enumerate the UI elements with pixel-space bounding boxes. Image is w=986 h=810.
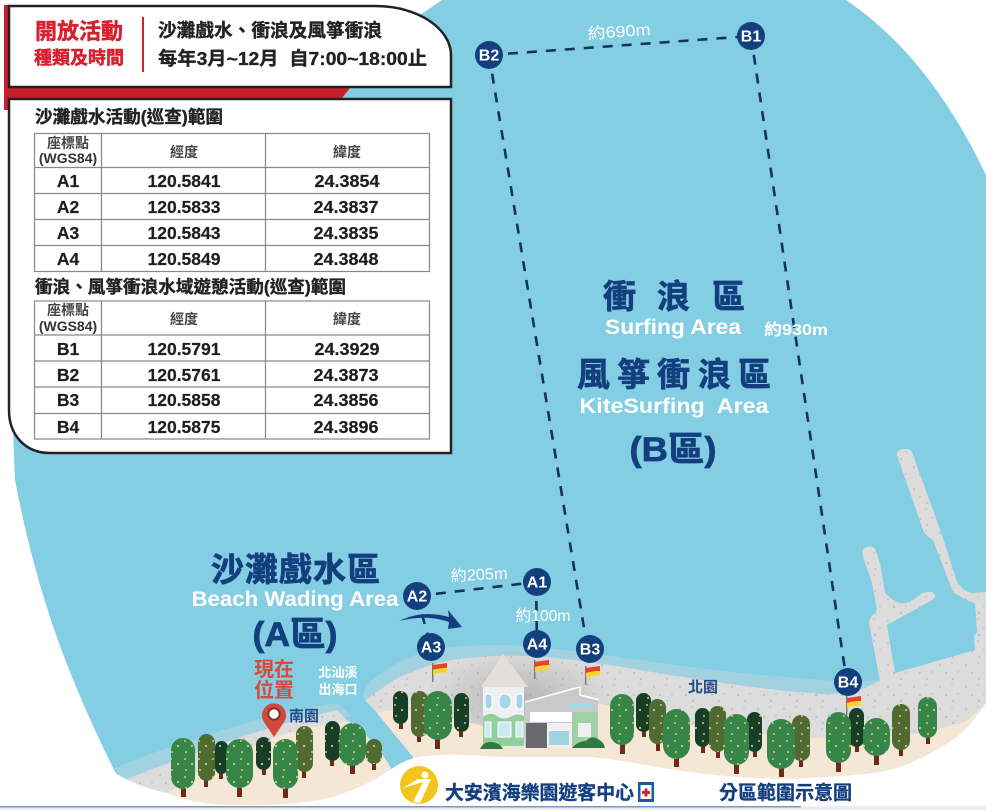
flag at A4 [534, 660, 549, 679]
activity and hours text: 每年3月~12月 自7:00~18:00止 [158, 48, 427, 69]
current position label [254, 658, 294, 702]
label: about 690m: 約690m [587, 21, 651, 43]
table: surfing coordinates: B4 [57, 417, 79, 437]
divider [142, 17, 144, 72]
marker A4 [523, 630, 551, 658]
table: surfing coordinates: B3 [57, 390, 79, 410]
green wing [572, 712, 598, 747]
heading: kitesurfing zone: 風箏衝浪區 [577, 356, 771, 393]
trees: north garden left [393, 691, 469, 749]
activity and hours text [158, 20, 427, 69]
flag at B3 [585, 666, 600, 685]
table: beach wading coordinates: (WGS84) [39, 150, 97, 166]
table: beach wading coordinates: 120.5849 [148, 249, 221, 269]
table: surfing coordinates: 24.3856 [314, 390, 379, 410]
icon: first aid [638, 782, 654, 802]
heading: surfing zone: Surfing Area [605, 316, 741, 339]
trees: south garden [171, 721, 382, 798]
marker B3: B3 [580, 642, 600, 658]
heading: kitesurfing zone [577, 356, 771, 418]
marker B3 [576, 635, 604, 663]
table: surfing coordinates [34, 301, 430, 439]
heading: zone A: (A區) [252, 616, 338, 654]
marker A3: A3 [421, 640, 441, 656]
bottom rule [0, 806, 986, 810]
icon: location pin [262, 703, 286, 737]
table: surfing coordinates: 24.3929 [314, 339, 380, 359]
table: beach wading coordinates: 24.3854 [314, 171, 380, 191]
current position label: 現在 [254, 658, 294, 681]
table: surfing coordinates: (WGS84) [39, 318, 97, 334]
marker B4 [834, 668, 862, 696]
heading: activities and times: 開放活動 [35, 19, 123, 44]
south shore land [115, 703, 392, 808]
zone B dashed boundary [489, 36, 845, 670]
table: surfing coordinates: 座標點 [47, 302, 89, 318]
table: beach wading coordinates: 24.3848 [314, 249, 379, 269]
table: surfing coordinates: 120.5791 [148, 339, 221, 359]
icon: information logo [400, 766, 438, 804]
heading: beach wading zone: Beach Wading Area [192, 588, 399, 611]
table: beach wading coordinates: 24.3837 [314, 197, 378, 217]
heading: activities and times: 種類及時間 [34, 48, 124, 68]
table: surfing coordinates: B2 [57, 365, 79, 385]
panel: opening hours [9, 6, 451, 87]
table: beach wading coordinates: A4 [57, 249, 79, 269]
heading: beach wading zone: 沙灘戲水區 [211, 551, 380, 588]
visitor centre building [480, 654, 605, 749]
table: surfing coordinates: 24.3873 [314, 365, 379, 385]
glass room [547, 723, 572, 747]
annex white band [530, 712, 572, 722]
door [526, 723, 547, 748]
label: visitor centre: 大安濱海樂園遊客中心 [445, 781, 634, 804]
red accent behind cards [4, 5, 350, 110]
table: surfing coordinates: 120.5875 [148, 417, 221, 437]
table: surfing coordinates: 緯度 [333, 311, 361, 327]
label: about 930m: 約930m [764, 320, 828, 339]
tower wall [483, 687, 524, 746]
marker A1: A1 [527, 574, 547, 592]
label: south garden: 南園 [289, 708, 319, 725]
white ground at bottom [100, 703, 986, 810]
annex body [525, 687, 598, 747]
marker B1 [737, 22, 765, 50]
table: beach wading coordinates: A3 [57, 223, 79, 243]
activity and hours text: 沙灘戲水、衝浪及風箏衝浪 [158, 20, 382, 41]
heading: beach wading patrol range: 沙灘戲水活動(巡查)範圍 [35, 107, 223, 127]
heading: activities and times [34, 19, 124, 68]
panel: coordinates [9, 99, 451, 453]
tower windows [485, 694, 523, 737]
table: beach wading coordinates: 座標點 [47, 135, 89, 151]
marker A4: A4 [527, 636, 547, 654]
tower green lower wall [483, 714, 524, 746]
arrow [399, 610, 462, 629]
north shore land and harbour [363, 449, 986, 810]
flag at A3 [432, 663, 447, 682]
wing window [578, 723, 591, 737]
glass window [549, 731, 569, 745]
marker A2 [403, 582, 431, 610]
river mouth label [318, 665, 358, 697]
table: beach wading coordinates [34, 134, 430, 272]
label: north garden: 北園 [688, 679, 718, 696]
marker A3 [417, 633, 445, 661]
table: beach wading coordinates: 120.5833 [148, 197, 221, 217]
heading: kitesurfing zone: KiteSurfing Area [580, 395, 769, 418]
zone A dashed boundary [417, 582, 537, 647]
table: surfing coordinates: 經度 [170, 311, 198, 327]
table: beach wading coordinates: 120.5843 [148, 223, 221, 243]
annex roof line [525, 687, 599, 702]
table: surfing coordinates: B1 [57, 339, 79, 359]
table: beach wading coordinates: 緯度 [333, 144, 361, 160]
table: beach wading coordinates: A1 [57, 171, 79, 191]
table: beach wading coordinates: A2 [57, 197, 79, 217]
annex vents [568, 703, 591, 708]
table: surfing coordinates: 120.5858 [148, 390, 221, 410]
heading: surfing and kitesurfing patrol range: 衝浪、風箏衝浪水域遊憩活動(巡查)範圍 [35, 277, 346, 297]
river mouth label: 出海口 [318, 682, 358, 697]
heading: beach wading zone [192, 551, 399, 611]
table: beach wading coordinates: 24.3835 [314, 223, 379, 243]
marker B2: B2 [479, 48, 499, 64]
marker B1: B1 [741, 28, 761, 46]
label: about 100m: 約100m [516, 607, 570, 625]
trees: north garden right [610, 693, 810, 777]
marker A1 [523, 568, 551, 596]
table: surfing coordinates: 24.3896 [314, 417, 379, 437]
heading: zone B: (B區) [630, 431, 716, 469]
label: zone diagram caption: 分區範圍示意圖 [719, 781, 852, 804]
heading: surfing zone: 衝浪區 [603, 278, 745, 315]
flag at B4 [846, 696, 861, 715]
marker B2 [475, 41, 503, 69]
marker A2: A2 [407, 588, 427, 606]
heading: surfing zone [603, 278, 745, 339]
bushes [480, 737, 605, 749]
table: beach wading coordinates: 經度 [170, 144, 198, 160]
current position label: 位置 [254, 678, 294, 702]
marker B4: B4 [838, 674, 858, 692]
table: beach wading coordinates: 120.5841 [148, 171, 221, 191]
table: surfing coordinates: 120.5761 [148, 365, 221, 385]
label: about 205m: 約205m [450, 565, 508, 585]
tower roof [481, 654, 528, 687]
river mouth label: 北汕溪 [318, 665, 358, 680]
trees: north garden far right [826, 697, 937, 772]
